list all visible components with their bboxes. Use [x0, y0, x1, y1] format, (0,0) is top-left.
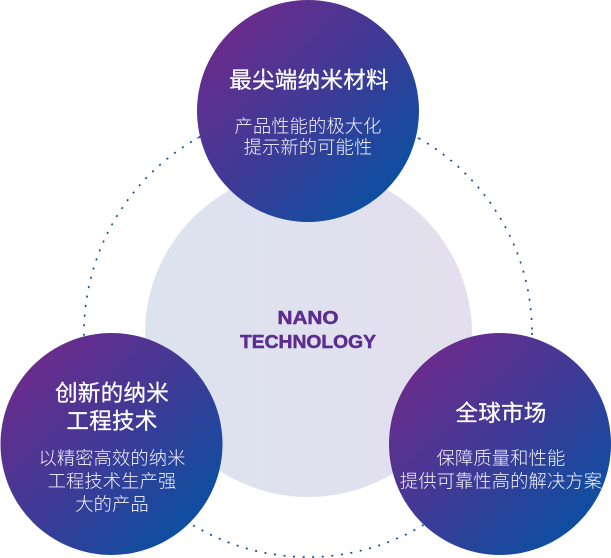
faint orbit dots showing through top circle — [197, 109, 419, 138]
text: top description — [234, 116, 382, 158]
panel: top circle — [197, 0, 419, 222]
heading: innovative nano engineering — [55, 381, 169, 434]
dotted orbit ring — [84, 109, 532, 557]
text: top description: 产品性能的极大化 — [234, 116, 382, 136]
heading: cutting-edge nanomaterials: 最尖端纳米材料 — [229, 68, 389, 93]
panel: left circle — [0, 333, 222, 555]
text: left description: 工程技术生产强 — [48, 470, 176, 492]
center label: nano technology — [240, 308, 376, 352]
text: right description: 保障质量和性能 — [437, 448, 565, 468]
panel: right circle — [389, 333, 611, 555]
text: left description — [38, 448, 186, 514]
text: top description: 提示新的可能性 — [244, 136, 372, 158]
text: left description: 大的产品 — [75, 494, 149, 514]
heading: global market: 全球市场 — [455, 401, 547, 426]
text: left description: 以精密高效的纳米 — [38, 448, 186, 468]
center label: nano technology: NANO — [278, 308, 338, 328]
heading: innovative nano engineering: 创新的纳米 — [55, 381, 169, 406]
center label: nano technology: TECHNOLOGY — [240, 332, 376, 352]
central pale circle — [145, 170, 472, 497]
text: right description — [400, 448, 602, 492]
heading: innovative nano engineering: 工程技术 — [66, 409, 158, 434]
text: right description: 提供可靠性高的解决方案 — [400, 470, 602, 492]
